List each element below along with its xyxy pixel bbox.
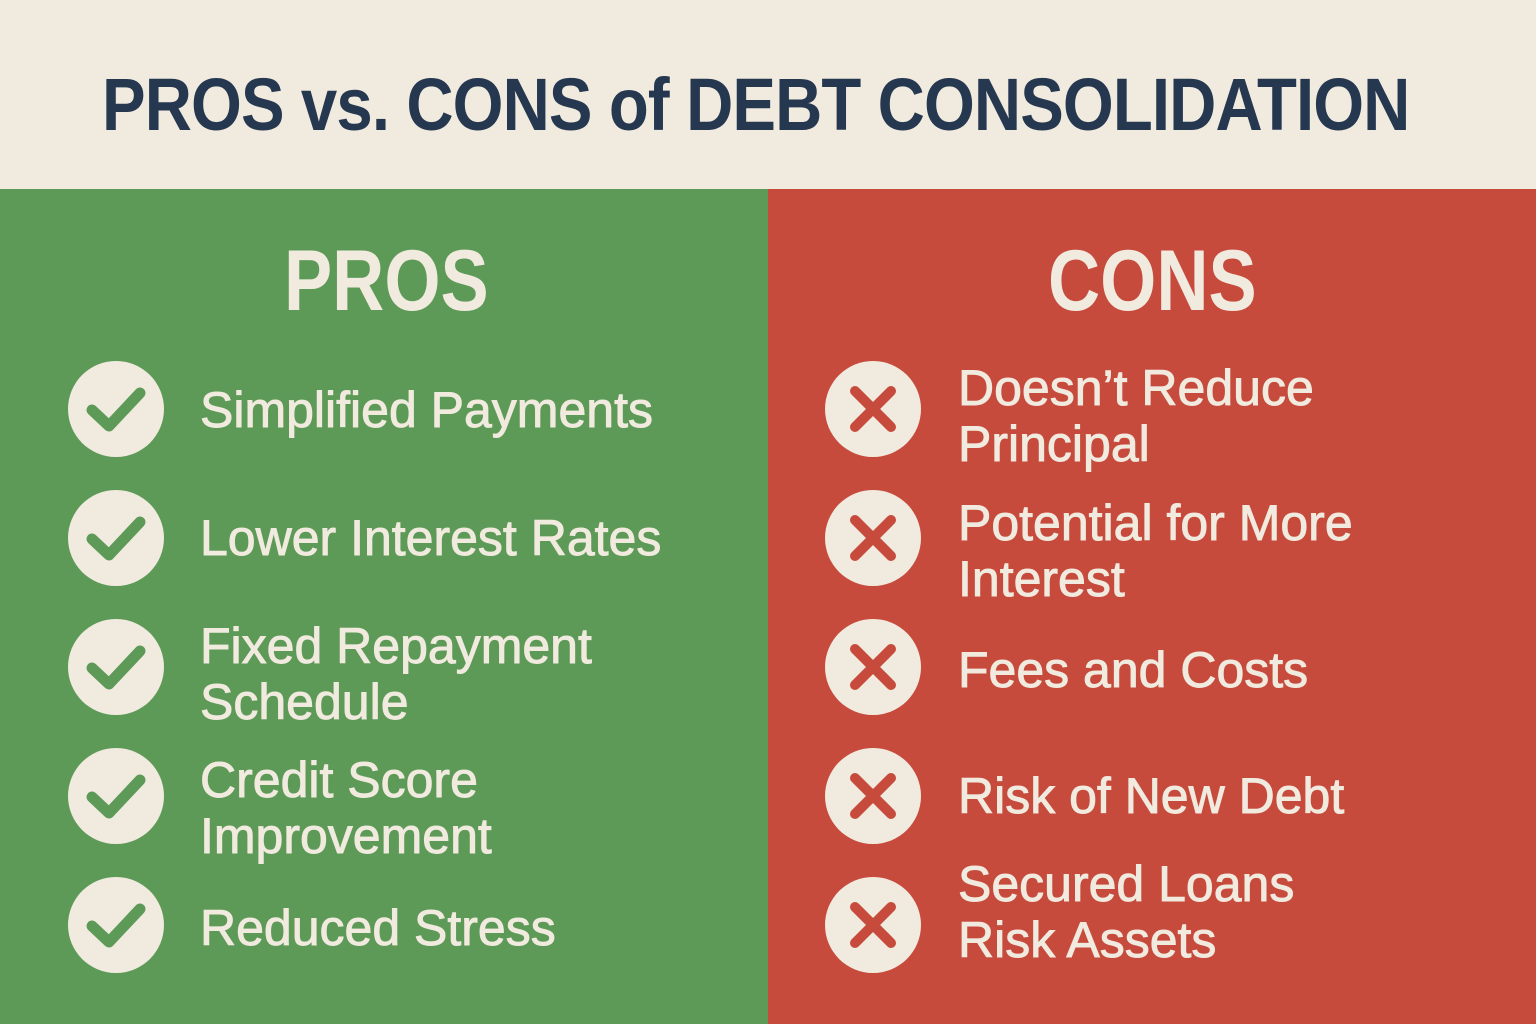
text: con 5 xyxy=(958,856,1294,968)
text: pro 1: Simplified Payments xyxy=(200,382,653,438)
icon: check 1 xyxy=(68,361,164,457)
text: con 1: Principal xyxy=(958,416,1150,472)
title: PROS vs. CONS of DEBT CONSOLIDATION xyxy=(102,63,1410,146)
text: con 4: Risk of New Debt xyxy=(958,768,1344,824)
text: pro 2: Lower Interest Rates xyxy=(200,510,661,566)
text: pro 4: Improvement xyxy=(200,808,492,864)
icon: check 5 xyxy=(68,877,164,973)
heading: pros: PROS xyxy=(284,233,489,329)
text: pro 5: Reduced Stress xyxy=(200,900,556,956)
icon: x 3 xyxy=(825,619,921,715)
text: con 5: Risk Assets xyxy=(958,912,1216,968)
cons items xyxy=(825,360,1353,973)
text: con 1 xyxy=(958,360,1314,472)
icon: check 3 xyxy=(68,619,164,715)
text: con 2: Potential for More xyxy=(958,495,1353,551)
icon: x 1 xyxy=(825,361,921,457)
panel: cons xyxy=(768,189,1536,1024)
header band xyxy=(0,0,1536,189)
icon: check 4 xyxy=(68,748,164,844)
text: con 1: Doesn’t Reduce xyxy=(958,360,1314,416)
icon: x 2 xyxy=(825,490,921,586)
text: pro 4 xyxy=(200,752,492,864)
heading: cons: CONS xyxy=(1048,233,1257,329)
panel: pros xyxy=(0,189,768,1024)
icon: x 4 xyxy=(825,748,921,844)
icon: x 5 xyxy=(825,877,921,973)
text: pro 3: Schedule xyxy=(200,674,408,730)
icon: check 2 xyxy=(68,490,164,586)
text: pro 3: Fixed Repayment xyxy=(200,618,592,674)
text: con 5: Secured Loans xyxy=(958,856,1294,912)
text: pro 4: Credit Score xyxy=(200,752,478,808)
text: con 3: Fees and Costs xyxy=(958,642,1308,698)
text: pro 3 xyxy=(200,618,592,730)
text: con 2 xyxy=(958,495,1353,607)
pros items xyxy=(68,361,661,973)
text: con 2: Interest xyxy=(958,551,1125,607)
